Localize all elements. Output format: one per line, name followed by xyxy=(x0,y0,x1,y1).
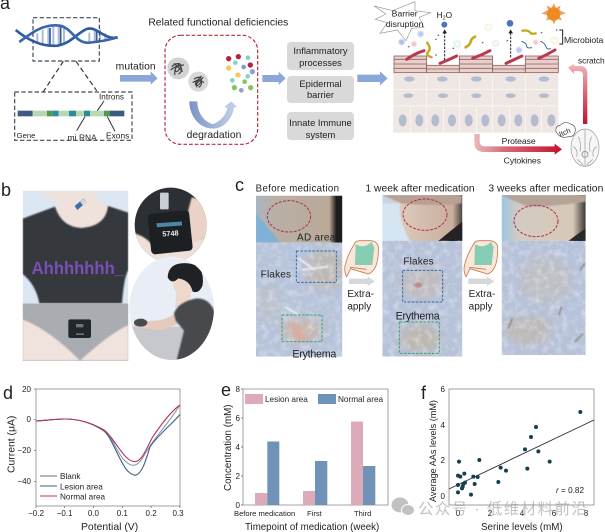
x category labels: Before medication xyxy=(234,509,295,518)
correlation label: r = 0.82 xyxy=(556,486,584,495)
H2O label: O xyxy=(446,10,453,20)
y tick labels: 6 xyxy=(236,414,241,423)
panel a: genetics to degradation xyxy=(15,17,288,144)
photo column: 3 weeks xyxy=(502,195,586,355)
callout: barrier disruption: disruption xyxy=(386,19,424,29)
protease label: Protease xyxy=(502,136,536,146)
zoom dashed lines xyxy=(43,61,97,92)
y tick labels: 20 xyxy=(22,385,32,394)
callout: barrier disruption: Barrier xyxy=(392,9,418,19)
panel b: wearable photos xyxy=(23,187,215,362)
x tick labels: 0 xyxy=(456,509,461,518)
flakes box week 1 xyxy=(403,270,443,302)
panel d: current vs potential chart xyxy=(6,385,184,532)
H2O label: 2 xyxy=(443,16,446,22)
AD area label: AD area xyxy=(297,232,336,243)
box: inflammatory processes: Inflammatory xyxy=(293,45,348,56)
y tick labels: 0 xyxy=(27,415,32,424)
water drops with dashed arrows xyxy=(441,20,513,60)
flakes label before: Flakes xyxy=(261,269,291,280)
extra-apply label 1: Extra- xyxy=(347,289,374,300)
scratch label: scratch xyxy=(578,55,605,65)
y axis title: Average AAs levels (mM) xyxy=(428,400,438,502)
legend: Lesion area xyxy=(265,395,308,404)
photo: neck patch on shirt xyxy=(23,191,128,303)
axis ticks xyxy=(34,389,180,508)
box: epidermal barrier: Epidermal xyxy=(299,78,342,89)
panel label f: f xyxy=(421,383,427,403)
x tick labels: 0.3 xyxy=(172,509,184,518)
x tick labels: 0.2 xyxy=(146,509,157,518)
box: inflammatory processes: processes xyxy=(299,57,342,68)
legend: Normal area xyxy=(338,395,383,404)
cytokines label: Cytokines xyxy=(504,155,542,165)
microbiota label: Microbiota xyxy=(564,35,604,45)
y tick labels: 6 xyxy=(441,385,446,394)
plot frame xyxy=(36,389,180,506)
microbiota bacteria xyxy=(399,24,557,57)
flakes box before xyxy=(296,251,336,282)
degradation label: degradation xyxy=(187,130,242,141)
box: inflammatory processes xyxy=(287,42,354,70)
arrow: extra-apply 2 xyxy=(468,277,494,286)
icon: wechat xyxy=(392,498,414,516)
column heading: 1 week: 1 week after medication xyxy=(365,184,475,195)
DNA selection dashed box xyxy=(33,18,99,61)
callout: itch: Itch xyxy=(558,126,572,139)
mutation label: mutation xyxy=(116,61,156,72)
photo: device on lap xyxy=(23,303,128,361)
epidermis cells xyxy=(393,73,558,133)
y tick labels xyxy=(441,385,446,501)
x tick labels: −0.2 xyxy=(28,509,44,518)
box: innate immune system: system xyxy=(306,129,336,140)
extra-apply label 2: Extra- xyxy=(469,289,495,300)
column heading: 3 weeks: 3 weeks after medication xyxy=(488,184,604,195)
AD ellipse week 3 xyxy=(514,205,558,237)
curve: normal xyxy=(36,405,180,462)
arrow: protease cytokines xyxy=(474,134,562,155)
x tick labels: 6 xyxy=(552,509,557,518)
plot frame xyxy=(449,389,594,505)
y tick labels: 2 xyxy=(441,456,446,465)
photo column: before xyxy=(255,196,345,357)
box: epidermal barrier: barrier xyxy=(307,89,334,100)
x category labels xyxy=(234,509,371,518)
icon: brain xyxy=(571,129,599,167)
y tick marks xyxy=(241,389,243,505)
microbiota bracket xyxy=(559,30,563,44)
legend xyxy=(245,394,383,404)
y tick labels: 4 xyxy=(441,421,446,430)
icon: DNA helix xyxy=(16,25,118,46)
panel label b: b xyxy=(1,180,11,200)
degradation dashed panel xyxy=(165,35,258,144)
watermark text: 公众号 · 低维材料前沿 xyxy=(418,500,587,518)
box: innate immune system xyxy=(287,112,354,140)
arrow: to skin xyxy=(357,71,388,85)
x tick labels: 2 xyxy=(488,509,493,518)
regression line xyxy=(449,420,594,489)
x category labels: Third xyxy=(354,509,371,518)
legend: Lesion area xyxy=(60,482,103,492)
panel c: skin treatment photos xyxy=(255,184,604,361)
flakes label week 1: Flakes xyxy=(403,257,434,268)
legend: Blank xyxy=(60,472,81,481)
gene structure box xyxy=(15,92,132,142)
legend xyxy=(40,472,105,502)
curve: lesion xyxy=(36,414,180,475)
y tick labels: −20 xyxy=(17,446,32,455)
watermark xyxy=(392,498,587,518)
icon: arm applying medication 1 xyxy=(345,241,378,277)
extra-apply label 1 xyxy=(347,289,374,313)
functional category boxes xyxy=(287,42,354,140)
panel a: skin barrier diagram xyxy=(357,2,605,167)
erythema box before xyxy=(282,315,322,342)
photo: person using device xyxy=(128,255,215,362)
gene structure box: Exons xyxy=(106,131,129,141)
panel label d: d xyxy=(3,383,13,403)
erythema label week 1: Erythema xyxy=(396,311,440,323)
panel e: concentration bar chart xyxy=(223,385,388,532)
data points xyxy=(456,410,582,497)
extra-apply label 1: apply xyxy=(347,302,371,313)
H2O label: H xyxy=(437,10,443,20)
bars xyxy=(255,422,375,505)
panel label c: c xyxy=(235,175,244,195)
panel label e: e xyxy=(221,380,231,400)
extra-apply label 2 xyxy=(469,289,495,313)
erythema box week 1 xyxy=(399,322,439,353)
stratum corneum layers xyxy=(394,56,558,73)
degraded fragments xyxy=(226,54,255,93)
arrow: to functions xyxy=(262,72,286,85)
callout: itch xyxy=(556,123,575,139)
hair follicles xyxy=(407,50,555,63)
erythema label before: Erythema xyxy=(292,349,336,361)
callout: barrier disruption xyxy=(374,2,431,41)
icon: sun xyxy=(541,3,566,25)
shirt text: Ahhhhhhh_ xyxy=(32,258,124,278)
x tick labels: 0.0 xyxy=(88,509,100,518)
gene structure box: mi RNA xyxy=(68,132,97,142)
y axis title: Current (μA) xyxy=(6,416,18,473)
column heading: before: Before medication xyxy=(256,184,339,195)
plot frame xyxy=(243,389,388,505)
x tick labels: 0.1 xyxy=(117,509,128,518)
box: innate immune system: Innate Immune xyxy=(289,117,352,128)
box: epidermal barrier xyxy=(287,76,354,103)
icon: arm applying medication 2 xyxy=(464,241,498,277)
gene structure box: Introns xyxy=(99,93,124,102)
arrow: extra-apply 1 xyxy=(349,277,375,286)
y tick labels: 8 xyxy=(236,385,241,394)
y tick labels xyxy=(17,385,32,486)
arrow: mutation xyxy=(120,71,158,85)
y axis title: Concentration (mM) xyxy=(223,404,234,491)
panel f: scatter plot xyxy=(428,385,594,532)
AD area ellipse xyxy=(267,201,311,232)
x category labels: First xyxy=(307,509,323,518)
legend: Normal area xyxy=(60,492,105,502)
y tick labels: 4 xyxy=(236,443,241,452)
gene structure box: Gene xyxy=(17,131,35,140)
y tick labels: 2 xyxy=(236,472,241,481)
y tick labels: 0 xyxy=(236,501,241,510)
curve: blank xyxy=(36,405,180,465)
x tick labels: −0.1 xyxy=(57,509,73,518)
photo: device readout: 5748 xyxy=(162,228,179,239)
arrow: scratch xyxy=(568,64,587,124)
extra-apply label 2: apply xyxy=(469,302,493,313)
x tick labels: 4 xyxy=(520,509,525,518)
photo: device readout xyxy=(134,188,207,260)
AD ellipse week 1 xyxy=(403,199,447,230)
photo column: 1 week xyxy=(382,195,462,357)
x tick labels xyxy=(456,509,589,518)
arrow: degradation curve xyxy=(189,101,237,129)
y tick labels: −40 xyxy=(17,477,32,486)
x tick labels: 8 xyxy=(584,509,589,518)
heading: related functional deficiencies: Related functional deficiencies xyxy=(148,17,288,28)
y tick labels: 0 xyxy=(441,492,446,501)
y tick labels xyxy=(236,385,241,510)
x tick labels xyxy=(28,509,184,518)
